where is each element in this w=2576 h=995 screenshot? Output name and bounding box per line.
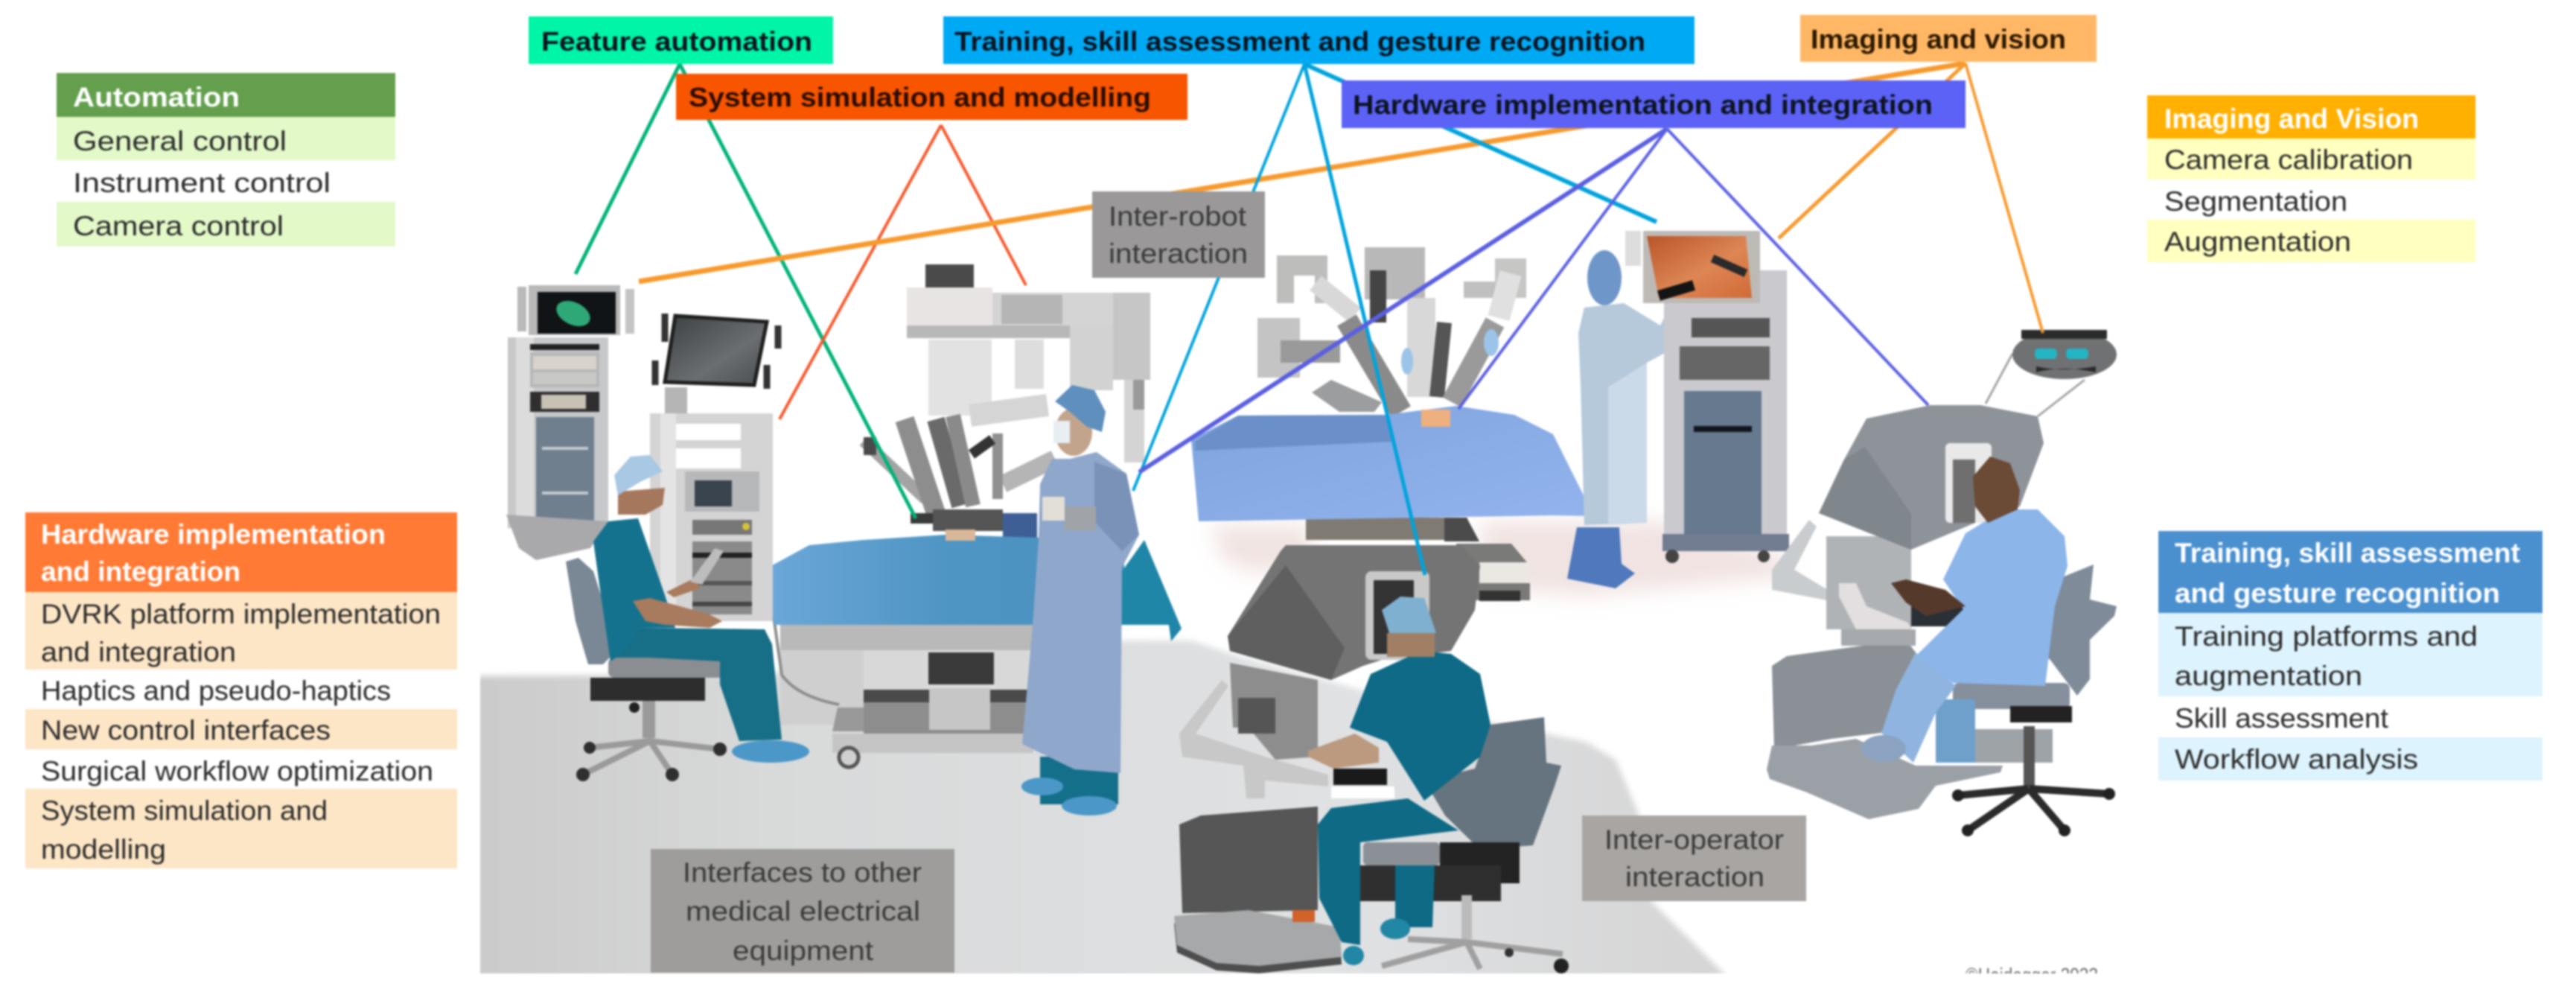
panel: imaging and vision <box>2147 95 2475 262</box>
rear standing surgeon <box>1567 250 1694 588</box>
label: hardware implementation and integration <box>1342 80 1966 128</box>
label: feature automation <box>529 16 833 64</box>
left vision tower <box>506 285 634 560</box>
training header: and gesture recognition <box>2175 578 2500 608</box>
training header: Training, skill assessment <box>2175 538 2520 568</box>
training rows: augmentation <box>2175 661 2362 691</box>
label: imaging and vision: Imaging and vision <box>1811 24 2066 54</box>
label: system simulation and modelling <box>676 74 1187 120</box>
automation rows <box>57 117 395 247</box>
hardware rows: and integration <box>41 637 236 667</box>
hardware rows <box>25 592 457 868</box>
copyright note: ©Heidegger 2022 <box>1966 964 2098 986</box>
floor tint under rear table <box>1210 521 1787 596</box>
rear surgical drape <box>1191 406 1594 521</box>
standing surgeon in gown <box>1021 385 1139 816</box>
label: hardware implementation and integration: Hardware implementation and integration <box>1353 89 1933 120</box>
connector lines: system simulation <box>780 125 1026 419</box>
chair <box>1952 565 2117 836</box>
hardware rows: Haptics and pseudo-haptics <box>41 675 391 706</box>
hardware rows: System simulation and <box>41 795 328 826</box>
front patient side cart <box>864 264 1150 542</box>
training rows: Training platforms and <box>2175 621 2478 652</box>
floor <box>447 640 1735 995</box>
centre surgeon console <box>1174 545 1569 973</box>
grey box: inter-robot interaction: Inter-robot <box>1109 201 1247 232</box>
rear robot arms <box>1257 247 1526 412</box>
left monitor and equipment tower <box>650 314 778 621</box>
hardware rows: New control interfaces <box>41 715 331 746</box>
chair <box>1360 717 1569 973</box>
automation rows: General control <box>73 126 287 156</box>
automation header: Automation <box>73 82 240 112</box>
hardware header: and integration <box>41 556 240 587</box>
imaging rows: Camera calibration <box>2164 144 2413 175</box>
panel: hardware implementation and integration <box>25 512 457 868</box>
automation rows: Instrument control <box>73 168 331 198</box>
hardware header <box>25 512 457 592</box>
chair <box>566 558 727 781</box>
panel: automation <box>57 73 395 247</box>
hardware rows: Surgical workflow optimization <box>41 756 433 786</box>
grey box: interfaces to other medical electrical equipment: Interfaces to other <box>683 857 922 888</box>
hardware header: Hardware implementation <box>41 519 386 550</box>
label: training, skill assessment and gesture recognition <box>943 16 1695 64</box>
label: imaging and vision <box>1800 15 2097 62</box>
training rows: Workflow analysis <box>2175 744 2418 775</box>
connector lines: imaging and vision <box>639 63 2043 333</box>
grey box: interfaces to other medical electrical equipment: equipment <box>733 935 874 966</box>
automation rows: Camera control <box>73 211 284 241</box>
label: system simulation and modelling: System simulation and modelling <box>689 82 1151 112</box>
console viewer head <box>1228 545 1480 680</box>
grey box: interfaces to other medical electrical equipment: medical electrical <box>686 896 920 926</box>
rear table base <box>1306 518 1530 601</box>
grey box: interfaces to other medical electrical equipment <box>651 849 954 973</box>
training header <box>2158 531 2542 613</box>
training rows <box>2158 613 2542 781</box>
grey box: inter-operator interaction <box>1582 816 1806 901</box>
grey box: inter-robot interaction <box>1092 191 1265 278</box>
eyepiece inset <box>1986 330 2117 416</box>
front surgical drape <box>767 530 1182 641</box>
label: training, skill assessment and gesture recognition: Training, skill assessment and gesture recognition <box>954 26 1645 57</box>
illustration: operating room scene <box>447 231 2117 995</box>
training rows: Skill assessment <box>2175 703 2389 734</box>
automation header <box>57 73 395 117</box>
front patient table <box>752 558 1033 767</box>
grey box: inter-operator interaction: Inter-operator <box>1604 824 1784 855</box>
hardware rows: modelling <box>41 834 166 865</box>
console lower body <box>1174 663 1394 973</box>
imaging header <box>2147 95 2475 139</box>
connector lines: hardware <box>1139 129 1928 472</box>
connector lines: feature automation <box>576 64 916 518</box>
imaging rows: Augmentation <box>2164 226 2351 257</box>
imaging header: Imaging and Vision <box>2164 104 2419 134</box>
imaging rows <box>2147 139 2475 262</box>
rear vision cart with monitor <box>1625 231 1789 563</box>
connector lines: training <box>1133 64 1657 575</box>
grey box: inter-robot interaction: interaction <box>1109 238 1248 269</box>
right surgeon console <box>1767 330 2117 836</box>
imaging rows: Segmentation <box>2164 186 2347 217</box>
label: feature automation: Feature automation <box>541 26 812 57</box>
grey box: inter-operator interaction: interaction <box>1625 862 1764 892</box>
seated surgeon with tablet <box>566 455 809 781</box>
panel: training, skill assessment and gesture recognition <box>2158 531 2542 781</box>
hardware rows: DVRK platform implementation <box>41 599 441 629</box>
